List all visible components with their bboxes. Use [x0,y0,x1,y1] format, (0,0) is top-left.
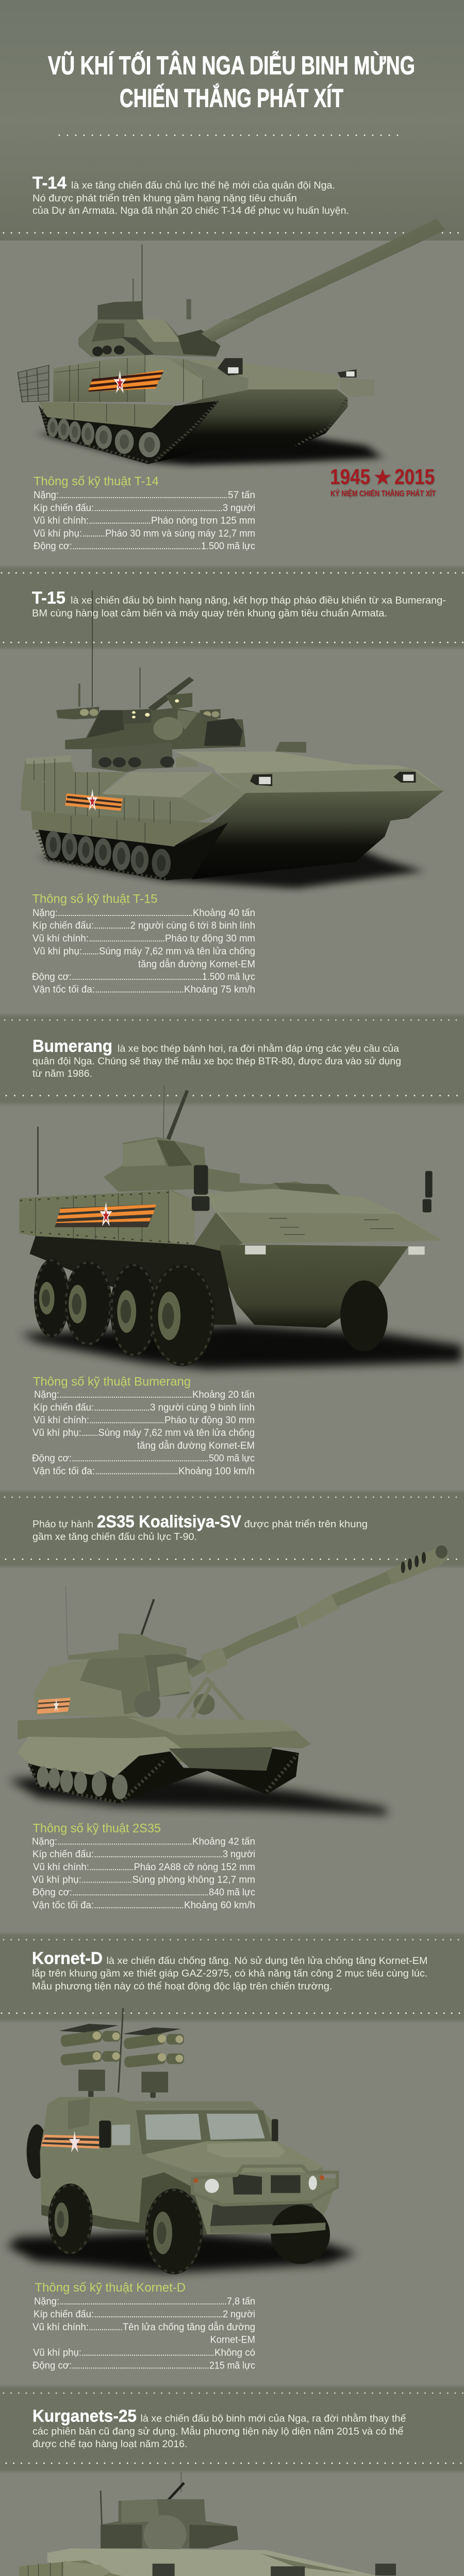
intro text: T-14: của Dự án Armata. Nga đã nhận 20 chiếc T-14 để phục vụ huấn luyện. [32,206,349,216]
row: weight: ................................................................................. [59,2296,227,2307]
row: top speed: Vận tốc tối đa: [32,1900,94,1911]
row: top speed: Vận tốc tối đa: [33,984,95,995]
row: main weapon: Vũ khí chính: [34,515,89,527]
row: secondary weapon: Vũ khí phụ: [32,1874,81,1886]
row: weight: .................................................................................. [59,490,228,501]
row: top speed: Khoảng 75 km/h [184,984,255,995]
intro text: T-15: BM cùng hàng loạt cảm biến và máy quay trên khung gầm tiêu chuẩn Armata. [32,608,387,619]
row: weight [34,1389,255,1400]
row: engine [32,972,255,982]
row: engine: ............................................................... [72,972,202,982]
row: crew: ........................... [94,1402,150,1413]
row: secondary weapon: ........... [82,529,105,539]
row: crew [32,920,255,931]
row: main weapon [32,2321,255,2333]
band [0,1931,464,2023]
row: main weapon: ..................... [89,1862,134,1873]
front plate [175,791,444,879]
intro text: 2S35: 2S35 Koalitsiya-SV [97,1512,241,1531]
row: main weapon: .............................. [89,515,151,527]
row: crew: 2 người cùng 6 tới 8 binh lính [130,920,255,931]
row: engine: .............................................................. [72,541,201,552]
intro text: Kurganets-25: Kurganets-25 [32,2406,137,2426]
row: secondary weapon: ........................ [81,1874,132,1886]
intro text: Kurganets-25: là xe chiến đấu bộ binh mới của Nga, ra đời nhằm thay thế [140,2413,406,2425]
turret and launchers [56,677,306,772]
front slope and underside [157,389,347,462]
row: crew [34,2309,255,2320]
intro text: 2S35: Pháo tự hành [32,1519,93,1530]
row: crew: Kíp chiến đấu: [34,1402,94,1413]
panel: T-15 section [0,565,464,995]
spec table: T-14 [34,474,255,552]
row: weight: 7,8 tấn [227,2296,255,2307]
row: engine [32,2361,255,2371]
body [40,2097,337,2234]
ribbon of Saint George [55,1202,156,1227]
row: main weapon: Tên lửa chống tăng dẫn đường [123,2321,255,2333]
row: main weapon: Pháo 2A88 cỡ nòng 152 mm [134,1862,255,1873]
turret [78,319,256,357]
intro text: T-14: Nó được phát triển trên khung gầm hạng nặng tiêu chuẩn [32,193,297,204]
lights [218,358,357,378]
spec table: T-15 [32,892,255,995]
band [0,565,464,650]
row: top speed: ......................................... [95,1466,178,1477]
row: weight: Nặng: [32,908,58,919]
spare wheel [27,2124,47,2179]
title: CHIẾN THẮNG PHÁT XÍT [120,83,343,112]
row: main weapon: Vũ khí chính: [32,934,89,944]
row: main weapon [34,1415,255,1426]
panel: Kornet-D section [0,1931,464,2371]
row: weight [32,908,255,919]
vehicle: T-15 [21,590,444,888]
row: engine: .................................................................. [72,1453,209,1464]
row: secondary weapon: Súng máy 7,62 mm và tên lửa chống [98,1428,255,1438]
row: engine: 1.500 mã lực [202,972,255,982]
row: weight: Nặng: [34,1389,59,1400]
ribbon of Saint George [41,2131,99,2153]
row: top speed: Vận tốc tối đa: [33,1466,95,1477]
row: top speed [33,1466,255,1477]
row: engine: 840 mã lực [209,1887,255,1898]
intro text: Bumerang [32,1037,401,1079]
row: main weapon: Pháo tự động 30 mm [164,1415,255,1426]
intro text: T-14: T-14 [32,173,67,192]
hull [19,1189,443,1251]
intro text: T-14 [32,173,349,216]
spec table: 2S35 [32,1822,255,1911]
row: crew: 3 người [223,503,255,514]
panel: Kurganets-25 section [0,2384,464,2576]
rear cage [18,365,49,402]
intro text: 2S35: gầm xe tăng chiến đấu chủ lực T-90. [32,1532,197,1543]
row: secondary weapon: Vũ khí phụ: [34,946,82,957]
row: secondary weapon [32,1874,255,1886]
row: weight: ................................................................ [59,1389,192,1400]
row: weight: ................................................................. [58,908,193,919]
row: crew: Kíp chiến đấu: [32,1849,94,1860]
intro text: Kurganets-25: các phiên bản cũ đang sử dụng. Mẫu phương tiện này lộ diện năm 2015 và có thể [32,2426,403,2437]
intro text: Kornet-D: là xe chiến đấu chống tăng. Nó sử dụng tên lửa chống tăng Kornet-EM [106,1956,428,1967]
row: top speed: Khoảng 100 km/h [178,1466,255,1477]
row: main weapon: ..................................... [89,1415,164,1426]
row: secondary weapon continued: tăng dẫn đường Kornet-EM [138,958,255,970]
lights [153,2564,396,2576]
spec table: 2S35: Thông số kỹ thuật 2S35 [33,1822,161,1835]
row: weight: Nặng: [32,1836,57,1848]
row: weight: Khoảng 20 tấn [192,1389,255,1400]
row: top speed: ........................................... [95,984,184,995]
vehicle: Bumerang [19,1085,461,1369]
row: secondary weapon: ................................................................ [81,2347,214,2359]
row: secondary weapon: Vũ khí phụ: [34,529,82,539]
row: crew: .............................................................. [94,1849,223,1860]
intro text: Kornet-D: Mẫu phương tiện này có thể hoạt động độc lập trên chiến trường. [32,1980,332,1992]
ribbon of Saint George [37,1698,71,1714]
hull [21,752,444,847]
headlights [245,1246,425,1255]
vehicle: T-14 tank [18,218,445,465]
header band [0,0,464,241]
row: crew [34,503,255,514]
wheels [34,1259,388,1366]
row: secondary weapon: ........ [81,1428,98,1438]
row: engine: Động cơ: [32,972,72,982]
row: secondary weapon: Pháo 30 mm và súng máy 12,7 mm [105,529,255,539]
row: main weapon continued: Kornet-EM [210,2335,255,2345]
missile launchers [59,2024,184,2098]
turret [101,2499,238,2554]
spec table: T-15: Thông số kỹ thuật T-15 [32,892,158,906]
band [0,1012,464,1107]
row: secondary weapon: Vũ khí phụ: [32,1428,81,1438]
row: weight: Khoảng 42 tấn [192,1836,255,1848]
row: main weapon: Vũ khí chính: [32,2322,89,2333]
row: main weapon: Pháo tự động 30 mm [165,934,255,944]
panel: T-14 section [0,0,464,552]
hull [16,1716,311,1778]
turret [34,1633,245,1723]
row: engine: 215 mã lực [209,2361,255,2371]
row: engine: .................................................................. [72,2361,209,2371]
wheels [48,2183,330,2274]
tracks and wheels [37,823,228,880]
row: engine: Động cơ: [32,2361,72,2371]
vehicle: Kornet-D [7,2008,357,2274]
badge: 1945 2015 anniversary: KỶ NIỆM CHIẾN THẮNG PHÁT XÍT [330,488,436,498]
row: crew: Kíp chiến đấu: [32,920,94,931]
row: main weapon [34,515,255,527]
intro text: T-14: là xe tăng chiến đấu chủ lực thế hệ mới của quân đội Nga. [71,180,335,191]
badge: 1945 2015 anniversary: 2015 [394,465,435,488]
hull side [39,355,374,429]
row: engine: Động cơ: [32,1887,72,1898]
row: engine [32,1887,255,1898]
spec table: Bumerang [32,1375,255,1477]
row: main weapon: ..................................... [89,934,165,944]
row: engine [32,1453,255,1464]
intro text: Bumerang: là xe bọc thép bánh hơi, ra đời nhằm đáp ứng các yêu cầu của [118,1043,399,1054]
row: main weapon [32,934,255,944]
row: crew: .............................................................. [94,2309,223,2320]
spec table: T-14: Thông số kỹ thuật T-14 [34,474,159,488]
row: crew: 2 người [223,2309,255,2320]
row: engine: 500 mã lực [209,1453,255,1464]
row: top speed: Khoảng 60 km/h [184,1900,255,1911]
vehicle: 2S35 self-propelled gun [9,1546,449,1815]
hull top [47,2548,415,2576]
row: crew: 3 người cùng 9 binh lính [150,1402,255,1413]
ribbon of Saint George [65,789,123,811]
spec table: Kornet-D [32,2281,255,2371]
row: engine: Động cơ: [34,541,72,552]
tracks and wheels [28,1749,299,1803]
row: secondary weapon: ........ [82,946,99,957]
barrel [187,1546,449,1677]
row: secondary weapon: Súng máy 7,62 mm và tên lửa chống [99,946,255,957]
intro text: Bumerang: Bumerang [32,1037,112,1055]
front lower plate [219,1245,408,1328]
intro text: Kurganets-25: được chế tạo hàng loạt năm 2016. [32,2439,188,2450]
turret [104,1137,340,1200]
intro text: T-15: T-15 [32,588,65,607]
row: secondary weapon: Không có [214,2347,255,2359]
intro text: T-15 [32,588,446,619]
intro text: Kornet-D: lắp trên khung gầm xe thiết giáp GAZ-2975, có khả năng tấn công 2 mục tiêu cùng lúc. [32,1968,428,1979]
spec table: Bumerang: Thông số kỹ thuật Bumerang [33,1375,191,1389]
badge: 1945 2015 anniversary [330,465,436,498]
barrel [200,218,445,342]
mirrors [192,1165,433,1212]
intro text: 2S35: được phát triển trên khung [244,1519,368,1530]
intro text: Kornet-D: Kornet-D [32,1948,103,1968]
vehicle: Kurganets-25 [6,2472,444,2576]
row: weight: 57 tấn [228,490,255,501]
tracks and wheels [39,400,346,464]
row: main weapon: Vũ khí chính: [34,1415,89,1426]
spec table: Kornet-D: Thông số kỹ thuật Kornet-D [35,2281,186,2295]
row: secondary weapon: Vũ khí phụ: [33,2347,81,2359]
row: crew: .............................................................. [94,503,223,514]
intro text: Kurganets-25 [32,2406,406,2450]
row: crew: Kíp chiến đấu: [34,503,94,514]
ribbon of Saint George [88,370,163,393]
intro text: T-15: là xe chiến đấu bộ binh hạng nặng, kết hợp tháp pháo điều khiển từ xa Bumerang- [71,596,446,606]
panel: Bumerang section [0,1012,464,1477]
row: crew [34,1402,255,1413]
row: main weapon: Vũ khí chính: [33,1862,89,1873]
intro text: Bumerang: từ năm 1986. [32,1069,92,1079]
row: crew [32,1849,255,1860]
badge: 1945 2015 anniversary: 1945 [330,465,370,488]
intro text: 2S35 [32,1512,368,1543]
row: top speed [32,1900,255,1911]
row: weight: Khoảng 40 tấn [193,908,255,919]
row: engine: 1.500 mã lực [201,541,255,552]
lights [250,772,416,786]
band [0,1489,464,1569]
row: top speed [33,984,255,995]
row: main weapon [33,1862,255,1873]
row: top speed: ........................................... [94,1900,184,1911]
row: engine: .................................................................. [72,1887,209,1898]
row: weight [32,1836,255,1848]
row: secondary weapon [32,1428,255,1438]
row: crew: Kíp chiến đấu: [34,2309,94,2320]
row: weight: Nặng: [34,2296,59,2307]
row: crew: ................. [94,920,130,931]
row: secondary weapon continued: tăng dẫn đường Kornet-EM [137,1440,255,1451]
row: secondary weapon [34,946,255,957]
row: main weapon: Pháo nòng trơn 125 mm [151,515,255,527]
intro text: Bumerang: quân đội Nga. Chúng sẽ thay thế mẫu xe bọc thép BTR-80, được đưa vào sử dụng [32,1056,401,1067]
row: weight: ................................................................. [57,1836,192,1848]
panel: 2S35 section [0,1489,464,1911]
row: secondary weapon [33,2347,255,2359]
row: main weapon: ................ [89,2322,123,2333]
row: secondary weapon [34,529,255,539]
title [48,50,415,112]
row: secondary weapon: Súng phòng không 12,7 mm [132,1874,255,1886]
row: weight: Nặng: [34,490,59,501]
row: engine: Động cơ: [32,1453,72,1464]
band [0,2384,464,2474]
row: crew: 3 người [223,1849,255,1860]
row: engine [34,541,255,552]
hull side [19,2560,158,2576]
intro text: Kornet-D [32,1948,428,1992]
